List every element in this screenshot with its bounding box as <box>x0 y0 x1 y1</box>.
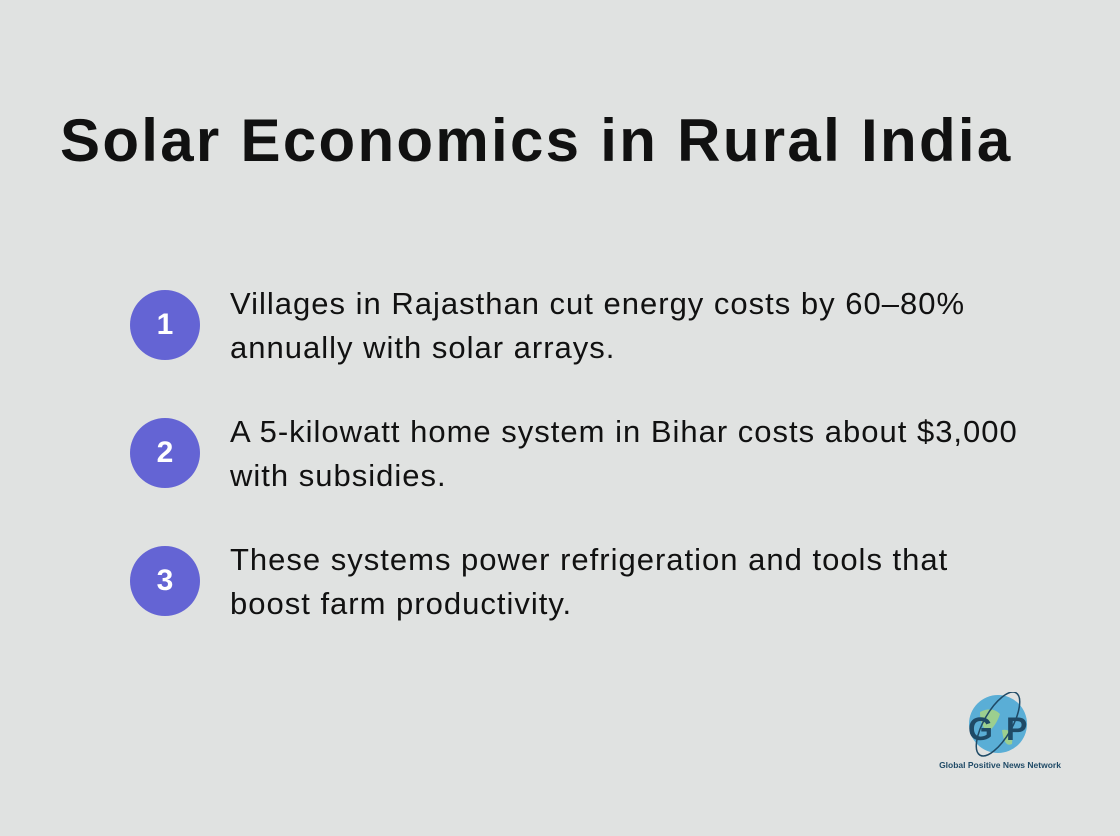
item 2 <box>130 414 1018 493</box>
logo: Global Positive News Network <box>939 760 1061 770</box>
badge 1 <box>130 290 200 360</box>
text 1: annually with solar arrays. <box>230 330 615 365</box>
item 3 <box>130 542 948 621</box>
text 2 <box>230 414 1018 493</box>
logo <box>939 692 1061 770</box>
text 3: These systems power refrigeration and tools that <box>230 542 948 577</box>
logo: P <box>1006 711 1027 747</box>
text 3 <box>230 542 948 621</box>
badge 1: 1 <box>157 308 173 341</box>
badge 2 <box>130 418 200 488</box>
text 1 <box>230 286 965 365</box>
title: Solar Economics in Rural India <box>60 107 1013 174</box>
item 1 <box>130 286 965 365</box>
text 2: with subsidies. <box>230 458 447 493</box>
badge 3 <box>130 546 200 616</box>
text 3: boost farm productivity. <box>230 586 572 621</box>
badge 3: 3 <box>157 564 173 597</box>
badge 2: 2 <box>157 436 173 469</box>
logo: G <box>968 711 993 747</box>
text 1: Villages in Rajasthan cut energy costs by 60–80% <box>230 286 965 321</box>
text 2: A 5-kilowatt home system in Bihar costs about $3,000 <box>230 414 1018 449</box>
